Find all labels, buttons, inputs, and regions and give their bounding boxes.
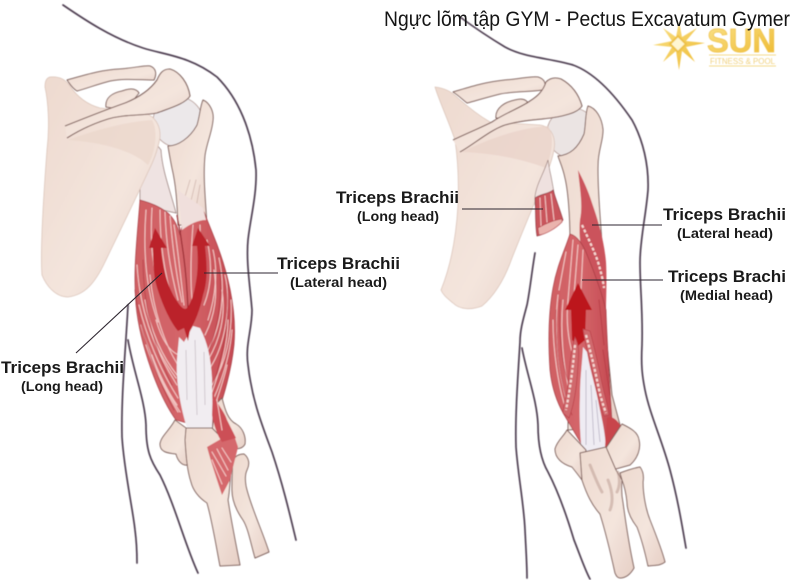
left lower-left fibers: [137, 265, 180, 412]
leader: left lateral head: [204, 272, 278, 274]
label: right medial head: [668, 268, 786, 303]
left scapula shading: [68, 120, 155, 165]
body outline: inner forearm: [522, 348, 590, 579]
right medial head muscle: [549, 234, 612, 448]
right scapula shading: [462, 126, 552, 168]
left clavicle: [67, 66, 156, 91]
right medial head fibers: [553, 240, 583, 410]
label: right medial head: Triceps Brachi: [668, 268, 786, 286]
left medial epicondyle: [160, 420, 192, 465]
label: right lateral head: [663, 206, 786, 241]
right lateral epicondyle: [606, 424, 640, 470]
right arm illustration: [435, 17, 686, 579]
body outline: inner upper arm: [516, 253, 535, 578]
right humeral head: [547, 108, 597, 158]
right radius: [620, 467, 665, 566]
right ulna: [580, 447, 634, 578]
right lateral head strip: [578, 170, 606, 310]
logo rule bottom: [709, 65, 776, 67]
leader: right long head: [462, 208, 543, 210]
right medial head dark fibers: [556, 300, 610, 415]
label: left long head: (Long head): [21, 379, 103, 394]
left arm illustration: [41, 5, 296, 573]
left humerus: [168, 100, 213, 225]
right left cut strip: [563, 337, 579, 418]
label: right long head: (Long head): [357, 209, 439, 224]
right clavicle: [453, 77, 545, 103]
left lateral head tendon highlight: [178, 190, 206, 230]
logo: Sun Fitness & Pool: [653, 22, 776, 70]
left humerus striations: [184, 180, 200, 208]
left dark fibers: [135, 260, 228, 410]
body outline: inner arm: [122, 305, 137, 563]
label: left lateral head: (Lateral head): [290, 275, 387, 290]
left long head tendon: [140, 145, 176, 213]
left tendon of triceps: [177, 326, 212, 428]
right arrow: [565, 283, 592, 346]
label: left lateral head: Triceps Brachii: [277, 255, 400, 273]
right long head stump: [535, 160, 563, 236]
logo tagline: FITNESS & POOL: [710, 57, 776, 66]
right right strip dashes: [586, 335, 606, 413]
right acromion: [453, 78, 582, 152]
right coracoid: [496, 99, 529, 118]
left upper fibers: [145, 208, 216, 322]
left tendon shading: [186, 340, 205, 415]
logo wordmark: SUN: [707, 22, 776, 59]
left humeral head: [153, 97, 203, 147]
right tendon: [580, 347, 606, 453]
body outline: shoulder and outer arm: [460, 17, 686, 548]
left anconeus muscle: [207, 432, 238, 495]
label: right lateral head: Triceps Brachii: [663, 206, 786, 224]
stump tendon: [535, 160, 556, 205]
left anconeus fibers: [212, 400, 231, 484]
leader: left long head: [76, 273, 162, 353]
left anconeus upper: [212, 392, 236, 442]
right lower red muscle: [605, 417, 623, 447]
right humerus shaft: [558, 106, 620, 430]
label: right lateral head: (Lateral head): [677, 226, 773, 241]
right acromion edge: [453, 78, 582, 152]
left ulna: [185, 428, 240, 566]
right medial epicondyle: [555, 430, 586, 480]
left triceps muscle mass: [135, 200, 235, 430]
left scapula: [41, 77, 160, 297]
leader: right medial head: [582, 279, 663, 281]
logo rule top: [709, 54, 776, 56]
right bone shading: [590, 465, 619, 510]
left acromion: [65, 69, 190, 138]
left acromion upper edge: [65, 69, 190, 138]
stump fibers: [540, 194, 554, 226]
stump cut surface: [538, 219, 562, 235]
label: left lateral head: [277, 255, 400, 290]
left lower-right fibers: [205, 258, 232, 412]
label: left long head: Triceps Brachii: [1, 359, 124, 377]
icon: sun star: [653, 22, 705, 70]
body outline: inner forearm: [128, 340, 198, 573]
left lateral epicondyle: [212, 398, 245, 450]
leader lines: [76, 209, 663, 353]
label: left long head: [1, 359, 124, 394]
label: right long head: [336, 189, 459, 224]
body outline: shoulder and outer arm: [63, 5, 296, 540]
right left strip dashes: [566, 345, 575, 410]
left radius: [232, 454, 269, 558]
right right cut strip: [583, 329, 609, 416]
left coracoid: [106, 89, 139, 108]
left muscle groove: [177, 215, 188, 310]
label: right medial head: (Medial head): [680, 288, 773, 303]
stump muscle: [535, 190, 563, 236]
leader: right lateral head: [592, 224, 662, 226]
label: right long head: Triceps Brachii: [336, 189, 459, 207]
right scapula: [435, 87, 554, 309]
left central dark red V arrows: [149, 228, 210, 341]
right lateral head cut strip: [582, 225, 604, 288]
right tendon shading: [586, 370, 600, 445]
icon: sun diamond: [670, 36, 686, 52]
